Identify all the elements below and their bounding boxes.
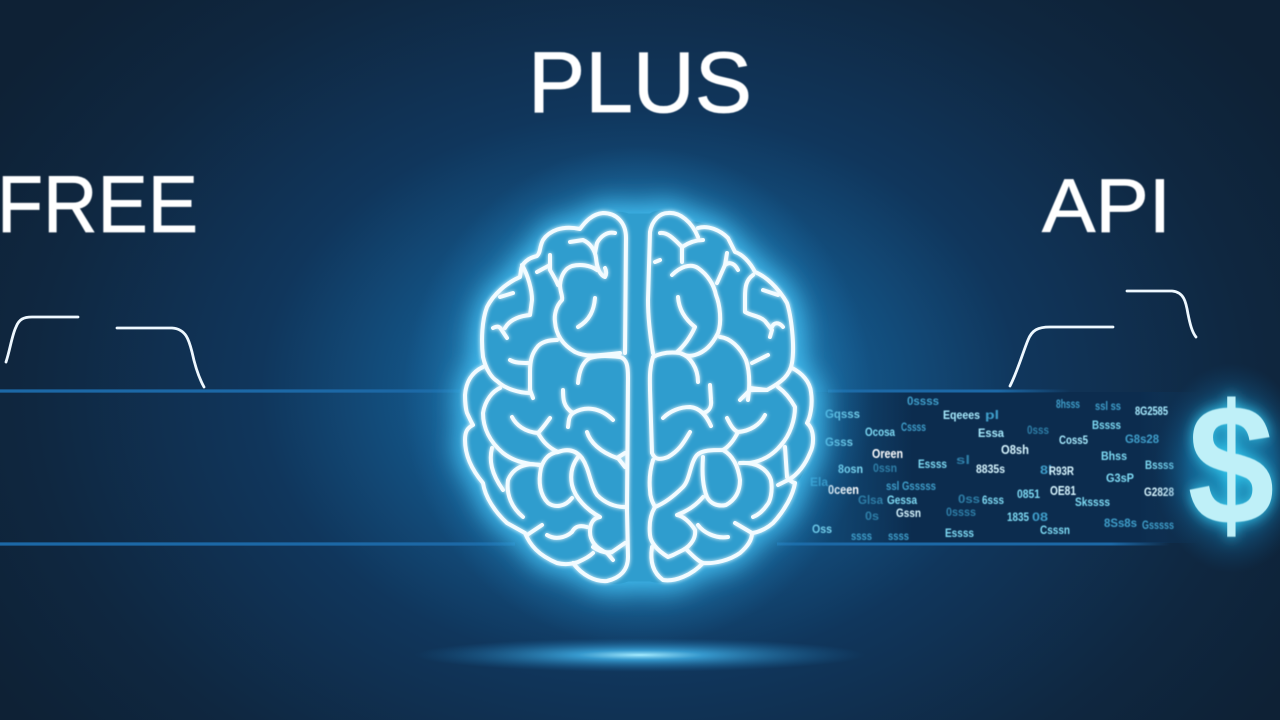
data code fragments: 0sss bbox=[1027, 425, 1049, 437]
data code fragments: R93R bbox=[1049, 464, 1074, 478]
left hemisphere outline bbox=[465, 213, 628, 581]
data code fragments: Gessa bbox=[887, 495, 918, 507]
data code fragments: 0ceen bbox=[828, 482, 859, 497]
title: PLUS: PLUS bbox=[528, 35, 752, 131]
data code fragments: ssss bbox=[851, 531, 872, 543]
data code fragments: Ela bbox=[810, 477, 829, 489]
right hemisphere outline bbox=[648, 213, 813, 580]
data code fragments: G8s28 bbox=[1125, 434, 1160, 446]
data code fragments: 0851 bbox=[1017, 489, 1041, 501]
data code fragments bbox=[810, 396, 1174, 543]
floor glow bbox=[415, 638, 865, 672]
data code fragments: sl bbox=[956, 455, 970, 467]
data code fragments: 0ss bbox=[958, 494, 980, 506]
data code fragments: pl bbox=[985, 410, 999, 422]
data code fragments: Glsa bbox=[858, 495, 884, 507]
data code fragments: 08 bbox=[1032, 512, 1049, 524]
icon: glowing dollar sign bbox=[1154, 363, 1280, 573]
data code fragments: 8l bbox=[1040, 465, 1052, 477]
data code fragments: Bhss bbox=[1101, 451, 1127, 463]
data code fragments: O8sh bbox=[1001, 442, 1029, 457]
icon: glowing dollar sign: $ bbox=[1188, 368, 1274, 561]
panel: code stream band bbox=[790, 392, 1200, 543]
data code fragments: 0s bbox=[865, 511, 879, 523]
data code fragments: Ocosa bbox=[865, 427, 896, 439]
data code fragments: 8Ss8s bbox=[1104, 518, 1137, 530]
data code fragments: ssl ss bbox=[1095, 401, 1121, 413]
data code fragments: Bssss bbox=[1092, 420, 1121, 432]
data code fragments: Essa bbox=[978, 428, 1005, 440]
data code fragments: Gssn bbox=[896, 506, 921, 520]
left bracket lines bbox=[6, 317, 204, 387]
data code fragments: 8osn bbox=[838, 464, 863, 476]
title: API: API bbox=[1042, 164, 1171, 249]
title: FREE: FREE bbox=[0, 160, 198, 250]
data code fragments: 0ssss bbox=[946, 507, 976, 519]
data code fragments: 0ssss bbox=[907, 396, 939, 408]
icon: glowing dollar sign: $ bbox=[1188, 368, 1274, 561]
data code fragments: Csssn bbox=[1040, 525, 1070, 537]
data code fragments: ssss bbox=[888, 531, 909, 543]
data code fragments: Oreen bbox=[872, 446, 903, 461]
data code fragments: Gqsss bbox=[825, 409, 860, 421]
data code fragments: ssl Gsssss bbox=[886, 481, 936, 493]
data code fragments: G3sP bbox=[1106, 473, 1134, 485]
data code fragments: Essss bbox=[945, 528, 974, 540]
data code fragments: Essss bbox=[918, 459, 947, 471]
data code fragments: Skssss bbox=[1075, 497, 1110, 509]
rail lines bbox=[0, 390, 1170, 546]
icon: glowing brain bbox=[403, 146, 873, 646]
data code fragments: Coss5 bbox=[1059, 435, 1088, 447]
data code fragments: Bssss bbox=[1145, 460, 1174, 472]
data code fragments: 6sss bbox=[982, 495, 1004, 507]
data code fragments: Eqeees bbox=[943, 410, 980, 422]
data code fragments: Gsssss bbox=[1142, 520, 1174, 532]
data code fragments: Oss bbox=[812, 524, 832, 536]
data code fragments: 8835s bbox=[976, 464, 1005, 476]
data code fragments: Gsss bbox=[825, 437, 853, 449]
right bracket lines bbox=[1010, 291, 1196, 386]
data code fragments: G2828 bbox=[1144, 485, 1174, 499]
data code fragments: 1835 bbox=[1007, 512, 1030, 524]
data code fragments: OE81 bbox=[1050, 483, 1076, 498]
data code fragments: Cssss bbox=[901, 422, 926, 434]
data code fragments: 8hsss bbox=[1056, 399, 1080, 411]
data code fragments: 0ssn bbox=[873, 463, 897, 475]
data code fragments: 8G2585 bbox=[1135, 406, 1168, 418]
